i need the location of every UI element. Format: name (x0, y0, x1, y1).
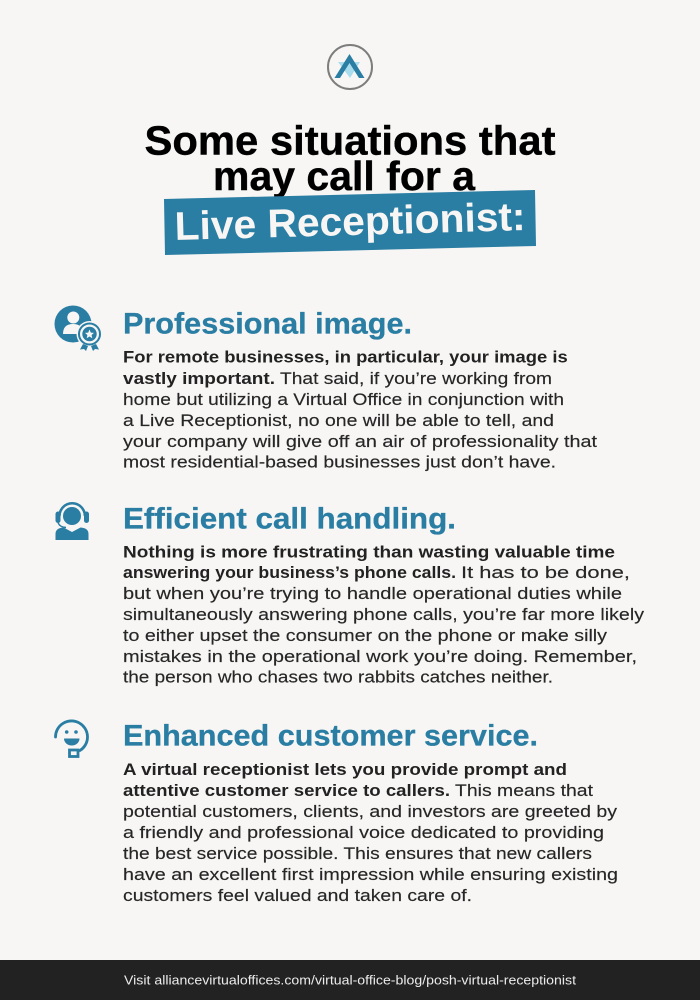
panel: enhanced customer service (55, 720, 618, 905)
text block: Nothing is more frustrating than wasting valuable time (123, 542, 615, 561)
heading: Enhanced customer service. (123, 720, 538, 753)
text block: a Live Receptionist, no one will be able to tell, and (123, 411, 554, 430)
text block: customers feel valued and taken care of. (123, 886, 472, 905)
text block: but when you’re trying to handle operational duties while (123, 584, 622, 603)
heading: Efficient call handling. (123, 502, 456, 535)
text block: answering your business’s phone calls. (123, 563, 456, 582)
text block: mistakes in the operational work you’re doing. Remember, (123, 647, 637, 666)
text block: For remote businesses, in particular, your image is (123, 348, 568, 367)
footer bar (0, 960, 700, 1000)
text block: This means that (455, 781, 593, 800)
text block (123, 348, 597, 472)
text block: the best service possible. This ensures that new callers (123, 844, 592, 863)
text block: It has to be done, (461, 563, 630, 582)
text block: to either upset the consumer on the phone or make silly (123, 626, 608, 645)
text block (123, 760, 618, 905)
text block: home but utilizing a Virtual Office in conjunction with (123, 390, 564, 409)
text block: vastly important. (123, 369, 275, 388)
panel: efficient call handling (56, 502, 645, 687)
text block: the person who chases two rabbits catches neither. (123, 668, 553, 687)
icon: smiling face with chat tail (55, 721, 87, 756)
icon: headset agent (56, 503, 89, 540)
text block: most residential-based businesses just don’t have. (123, 453, 556, 472)
text block: potential customers, clients, and investors are greeted by (123, 802, 618, 821)
text block: A virtual receptionist lets you provide prompt and (123, 760, 567, 779)
text block: That said, if you’re working from (280, 369, 552, 388)
footer bar: Visit alliancevirtualoffices.com/virtual-office-blog/posh-virtual-receptionist (124, 972, 576, 988)
text block (123, 542, 645, 687)
title: Some situations that (144, 118, 556, 164)
text block: attentive customer service to callers. (123, 781, 450, 800)
icon: person with award badge (54, 306, 102, 351)
title (144, 118, 556, 255)
text block: a friendly and professional voice dedicated to providing (123, 823, 604, 842)
text block: have an excellent first impression while ensuring existing (123, 865, 618, 884)
text block: simultaneously answering phone calls, you’re far more likely (123, 605, 645, 624)
logo (328, 45, 372, 89)
title: may call for a (213, 153, 476, 199)
heading: Professional image. (123, 308, 412, 340)
title highlight banner: Live Receptionist: (174, 195, 526, 249)
text block: your company will give off an air of professionality that (123, 432, 597, 451)
panel: professional image (54, 306, 597, 472)
